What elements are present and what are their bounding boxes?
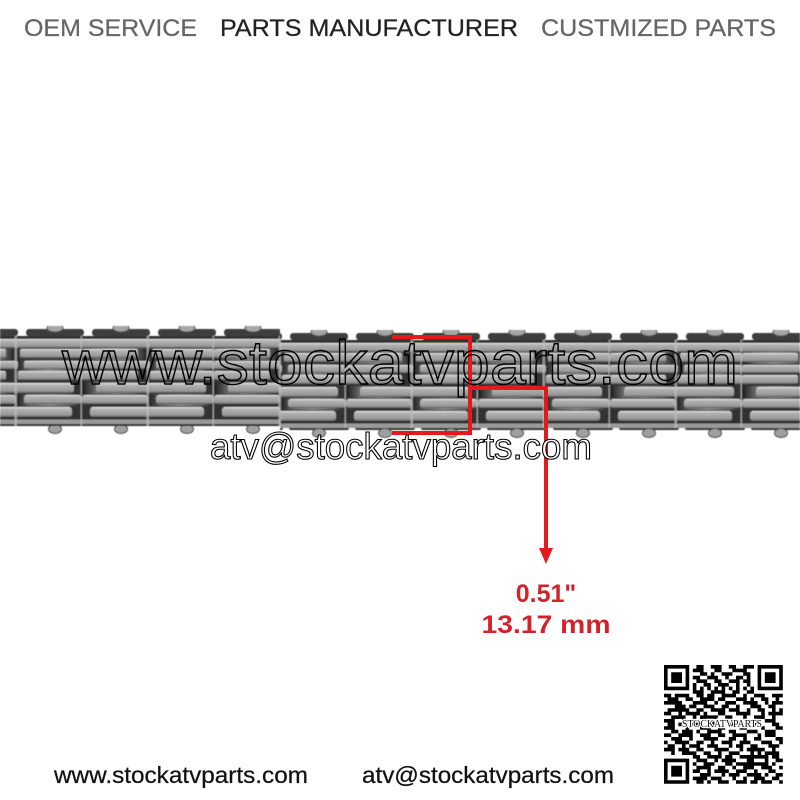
dimension label — [482, 580, 610, 639]
footer website: www.stockatvparts.com — [53, 762, 308, 788]
watermark url: www.stockatvparts.com — [61, 329, 738, 398]
dimension arrowhead — [539, 548, 553, 564]
footer email: atv@stockatvparts.com — [362, 762, 614, 788]
header tagline: CUSTMIZED PARTS — [541, 15, 776, 42]
header tagline — [24, 15, 776, 42]
header tagline: OEM SERVICE — [24, 15, 197, 42]
watermark email: atv@stockatvparts.com — [210, 426, 592, 467]
product photo: timing chain — [0, 326, 800, 440]
dimension label: 0.51" — [516, 580, 576, 608]
header tagline: PARTS MANUFACTURER — [220, 15, 518, 42]
QR code — [664, 667, 783, 782]
QR label: STOCKATVPARTS — [682, 718, 762, 730]
dimension label: 13.17 mm — [482, 611, 610, 639]
red dimension bracket — [392, 337, 546, 550]
